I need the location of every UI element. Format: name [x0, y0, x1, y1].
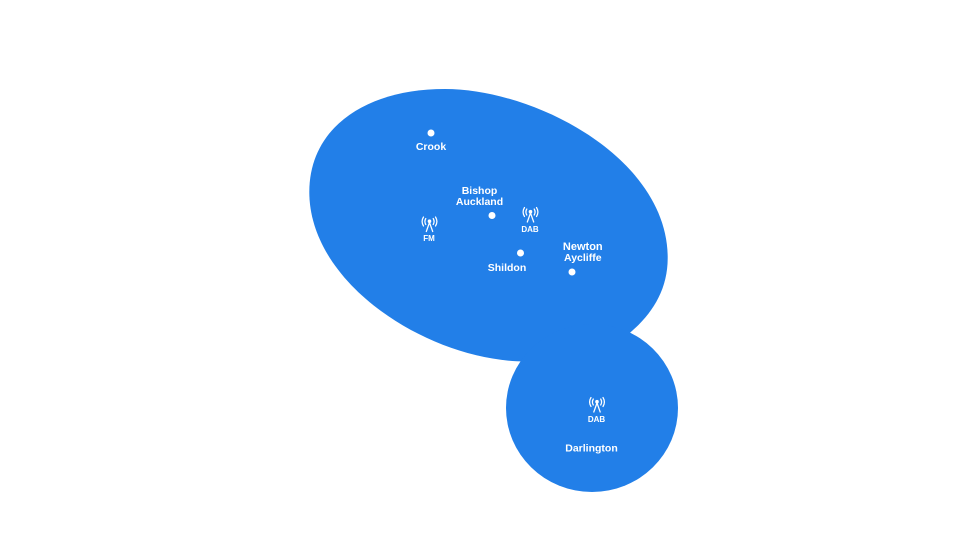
icon: FM transmitter: FM — [423, 234, 435, 243]
location: Bishop Auckland: Auckland — [456, 196, 503, 208]
coverage area: northern region — [309, 89, 668, 362]
location: Bishop Auckland: Bishop — [462, 185, 497, 197]
icon: DAB transmitter, Bishop Auckland — [521, 208, 539, 234]
location: Newton Aycliffe — [563, 241, 603, 276]
icon: DAB transmitter, Darlington: DAB — [588, 415, 605, 424]
icon: DAB transmitter, Bishop Auckland: DAB — [521, 225, 539, 234]
location: Shildon: Shildon — [488, 262, 526, 274]
coverage area: Darlington region — [506, 324, 678, 492]
location: Newton Aycliffe: Newton — [563, 241, 603, 253]
location: Crook — [416, 130, 446, 153]
location: Darlington: Darlington — [565, 442, 618, 454]
icon: FM transmitter — [422, 217, 437, 243]
icon: DAB transmitter, Darlington — [588, 398, 605, 424]
location: Crook: Crook — [416, 141, 446, 153]
location: Bishop Auckland — [456, 185, 503, 219]
location: Shildon — [488, 250, 526, 274]
location: Newton Aycliffe: Aycliffe — [564, 252, 602, 264]
